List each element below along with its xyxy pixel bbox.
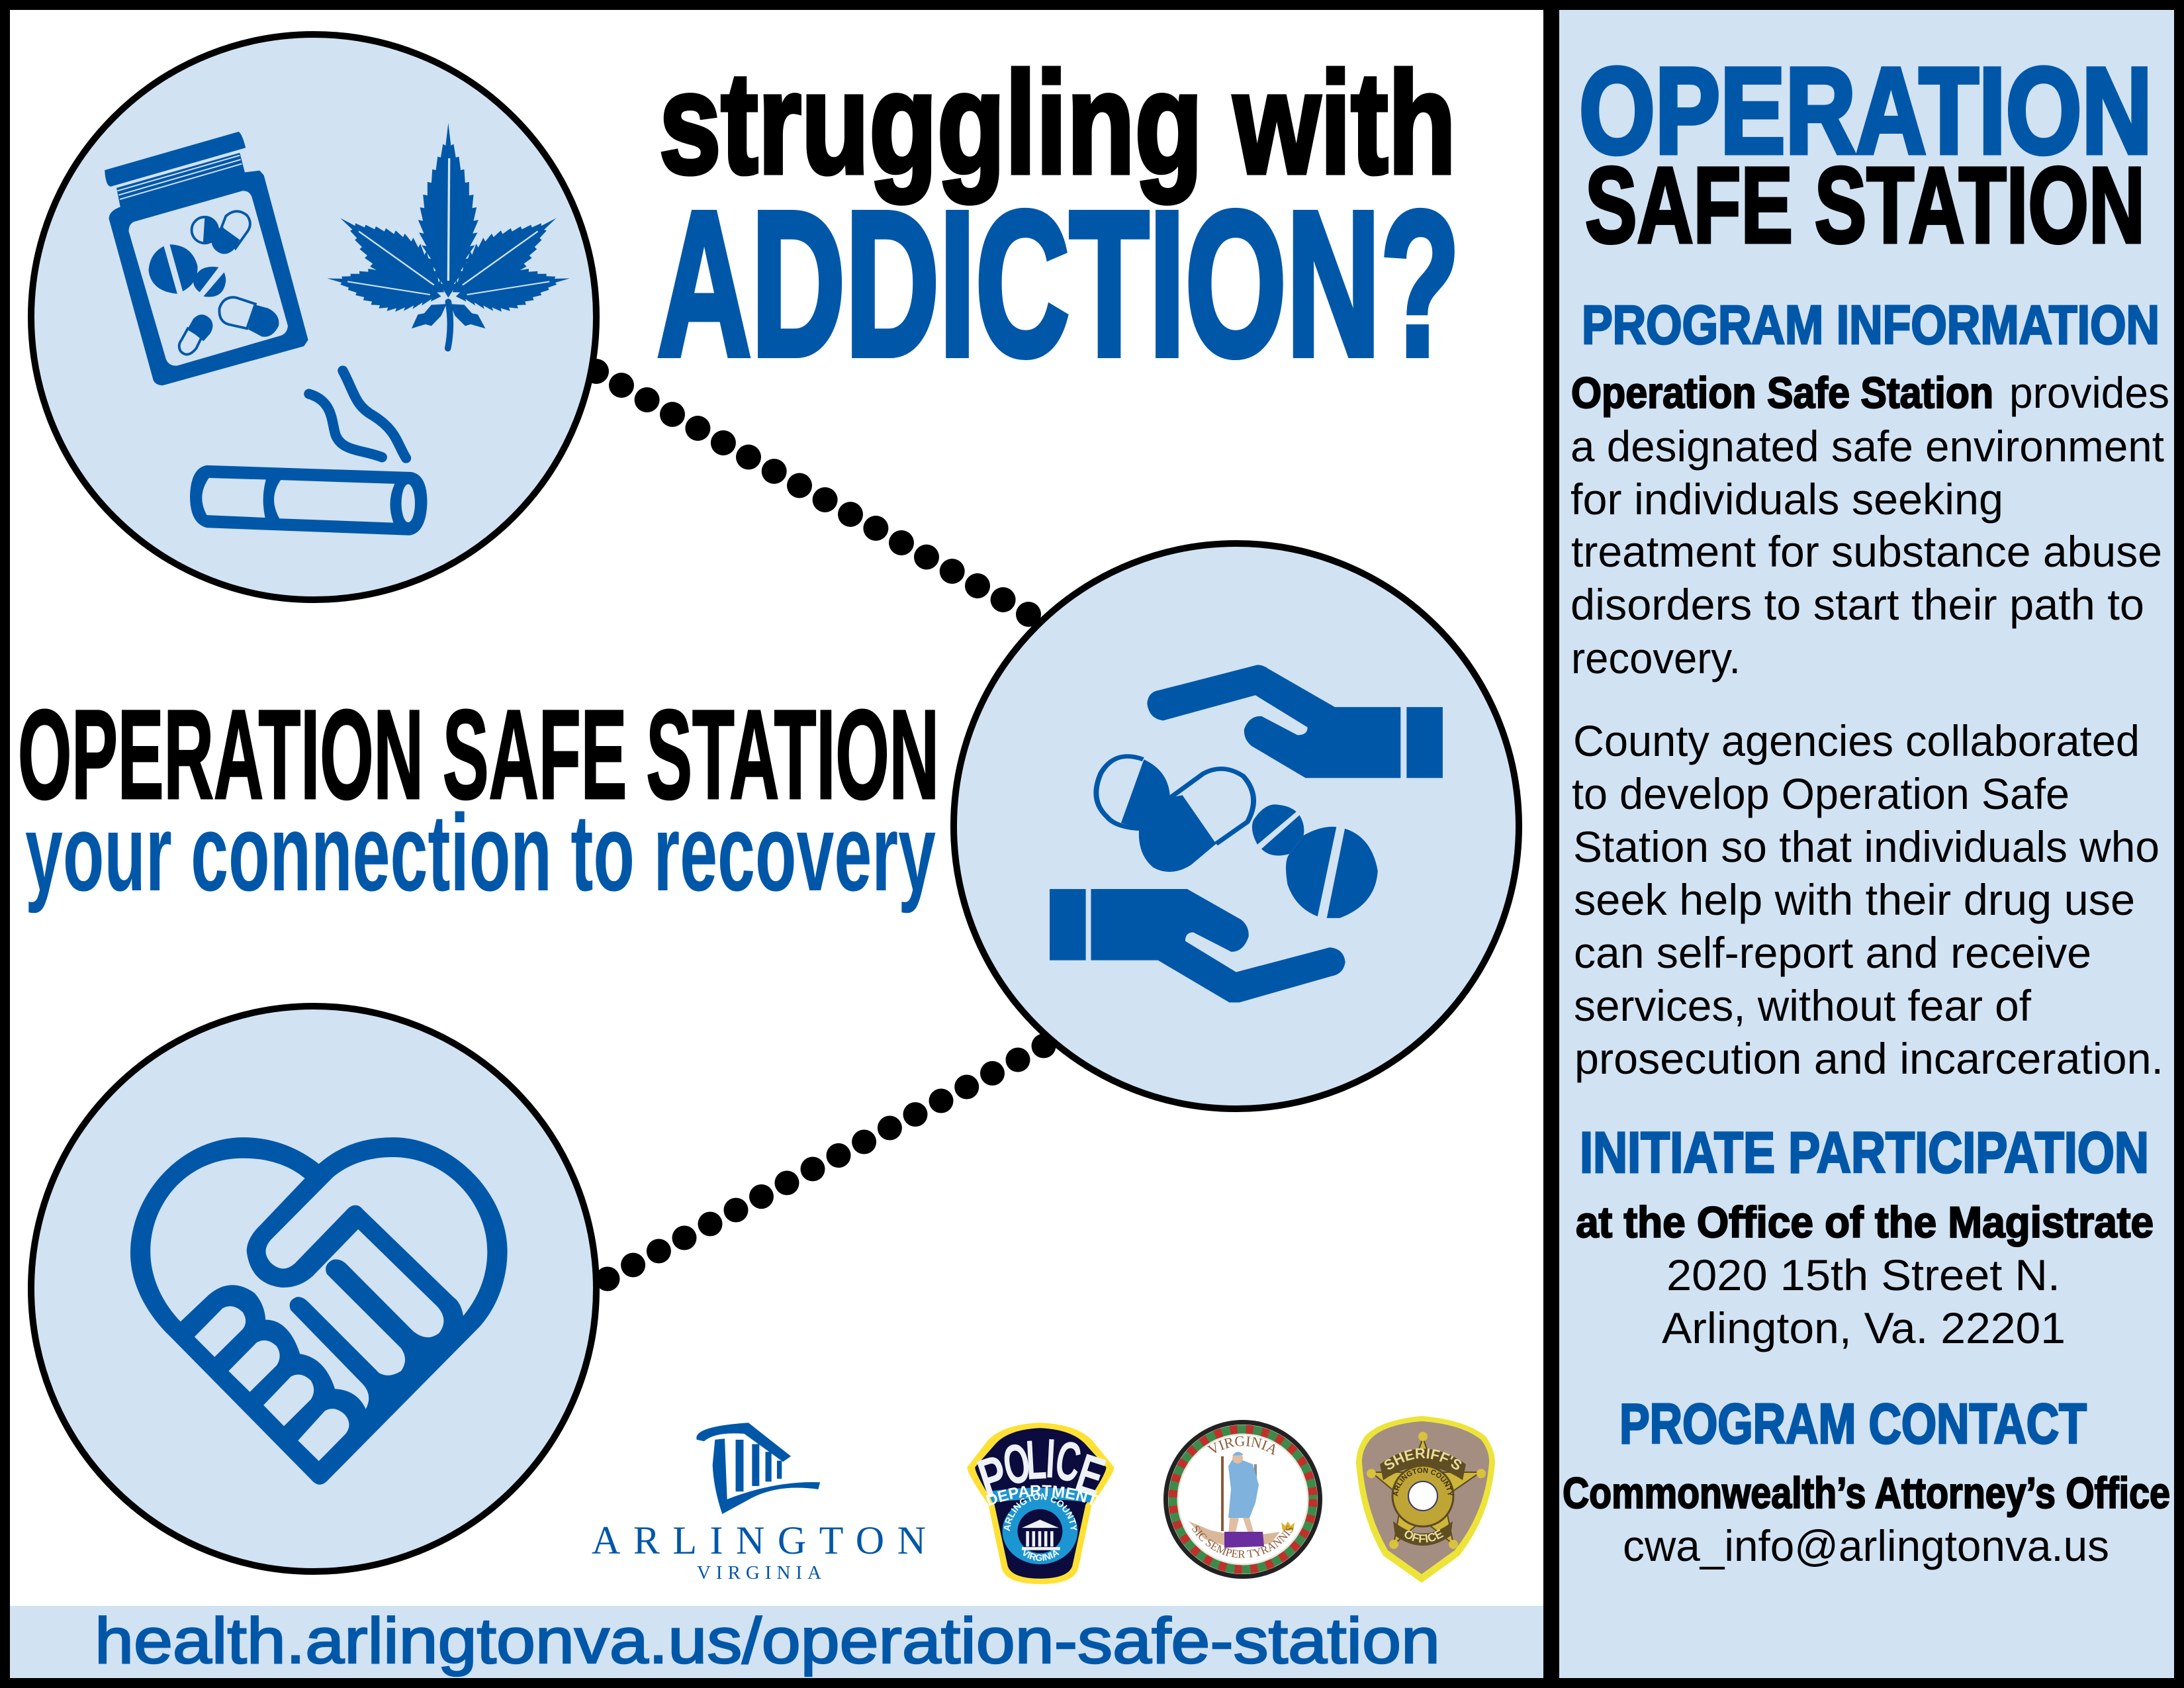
text block: magistrate address: Arlington, Va. 22201: [1662, 1303, 2066, 1352]
logo: Commonwealth of Virginia seal: SIC SEMPER TYRANNIS: [1192, 1525, 1293, 1558]
text block: program information second paragraph: seek help with their drug use: [1574, 875, 2135, 924]
logo: police department badge: O: [998, 1430, 1034, 1497]
logo: sheriff's office shield: [1356, 1416, 1495, 1583]
tagline: your connection to recovery: your connection to recovery: [25, 792, 936, 914]
text block: program information second paragraph: can self-report and receive: [1574, 928, 2091, 977]
logo: police department badge: L: [1024, 1428, 1048, 1491]
logo: police department badge: [967, 1423, 1115, 1584]
text block: program information first paragraph: provides: [2009, 368, 2169, 417]
logo: police department badge: C: [1051, 1429, 1085, 1494]
logo: sheriff's office shield: SHERIFF'S: [1385, 1448, 1461, 1470]
logo: Arlington Virginia: VIRGINIA: [697, 1562, 821, 1583]
circle panel: handshake heart: [31, 1006, 596, 1571]
headline: ADDICTION?: ADDICTION?: [657, 168, 1460, 399]
text block: program information first paragraph: treatment for substance abuse: [1571, 527, 2162, 576]
text block: program information second paragraph: prosecution and incarceration.: [1574, 1034, 2163, 1083]
text block: program information second paragraph: services, without fear of: [1574, 981, 2032, 1030]
website address bar: health.arlingtonva.us/operation-safe-station: [95, 1605, 1440, 1677]
text block: magistrate address: 2020 15th Street N.: [1666, 1250, 2060, 1299]
logo: police department badge: ARLINGTON COUNTY: [1003, 1493, 1077, 1532]
logo: Commonwealth of Virginia seal: VIRGINIA: [1207, 1436, 1275, 1455]
subheading: OPERATION SAFE STATION: OPERATION SAFE STATION: [18, 683, 939, 825]
text block: magistrate address: [1576, 1197, 2154, 1352]
right information panel background: [1559, 10, 2174, 1678]
text block: program information second paragraph: County agencies collaborated: [1573, 716, 2140, 765]
dotted connector: handshake circle to help circle: [596, 1034, 1056, 1291]
logo: Commonwealth of Virginia seal: [1163, 1420, 1322, 1579]
logo: police department badge: I: [1044, 1427, 1057, 1490]
text block: program information second paragraph: Station so that individuals who: [1573, 822, 2160, 871]
logo: Arlington Virginia: ARLINGTON: [592, 1519, 926, 1562]
icon: pill bottle: [105, 132, 308, 385]
text block: program information first paragraph: [1570, 368, 2169, 682]
text block: contact details: cwa_info@arlingtonva.us: [1623, 1521, 2109, 1570]
logo: sheriff's office shield: ARLINGTON COUNTY: [1393, 1468, 1453, 1496]
icon: cannabis leaf: [324, 123, 573, 348]
text block: contact details: [1563, 1468, 2170, 1570]
text block: program information second paragraph: to develop Operation Safe: [1572, 769, 2070, 818]
headline: struggling with: struggling with: [659, 43, 1456, 204]
circle panel: substances: [31, 34, 596, 600]
section heading: program contact: PROGRAM CONTACT: [1619, 1393, 2087, 1456]
text block: program information first paragraph: for individuals seeking: [1570, 475, 2003, 524]
logo: Arlington Virginia: [592, 1423, 926, 1583]
text block: program information first paragraph: recovery.: [1571, 633, 1741, 682]
text block: magistrate address: at the Office of the Magistrate: [1576, 1197, 2154, 1246]
icon: handshake forming a heart: [130, 1137, 508, 1485]
logo: police department badge: DEPARTMENT: [985, 1485, 1099, 1506]
logo: police department badge: VIRGINIA: [1023, 1549, 1060, 1561]
logo: sheriff's office shield: OFFICE: [1404, 1529, 1444, 1542]
text block: program information first paragraph: a designated safe environment: [1570, 422, 2164, 471]
text block: program information first paragraph: Operation Safe Station: [1571, 368, 1993, 417]
dotted connector: substances circle to help circle: [584, 359, 1041, 627]
logo: police department badge: E: [1069, 1442, 1112, 1509]
icon: hands exchanging pills: [1050, 665, 1443, 1002]
text block: program information second paragraph: [1572, 716, 2163, 1083]
logo: police department badge: P: [970, 1443, 1015, 1511]
circle panel: medicine handed over: [954, 543, 1519, 1109]
icon: smoking cigarette: [190, 371, 427, 536]
text block: program information first paragraph: disorders to start their path to: [1570, 580, 2144, 629]
